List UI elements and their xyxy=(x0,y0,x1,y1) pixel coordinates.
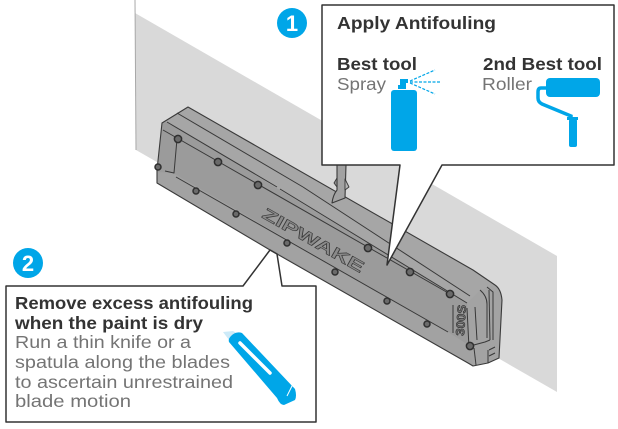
second best tool label: 2nd Best tool xyxy=(483,54,602,74)
callout 2 frame xyxy=(6,250,316,422)
zipwake interceptor device xyxy=(155,107,502,366)
best tool label: Best tool xyxy=(337,54,417,74)
mounting bracket xyxy=(332,165,349,203)
callout 2 heading: when the paint is dry xyxy=(14,313,203,333)
callout 2 body text: to ascertain unrestrained xyxy=(15,372,233,392)
icon: utility knife xyxy=(223,331,296,405)
brand logo: ZIPWAKE xyxy=(259,206,367,277)
icon: paint roller xyxy=(538,78,600,147)
callout 2 body text: spatula along the blades xyxy=(15,352,230,372)
callout 2 heading: Remove excess antifouling xyxy=(15,293,253,313)
grooves xyxy=(163,113,495,365)
step badge 2: 2 xyxy=(22,251,34,276)
wall xyxy=(135,0,557,392)
callout 1 frame xyxy=(322,5,614,265)
callout 2: remove excess antifouling xyxy=(6,250,316,422)
step badge 2 xyxy=(13,248,43,278)
callout 2 heading xyxy=(14,293,253,333)
bolts xyxy=(155,135,474,350)
callout 2 body text xyxy=(15,332,233,411)
device end cap xyxy=(467,285,502,366)
roller label: Roller xyxy=(482,74,532,94)
device top face xyxy=(162,107,495,303)
device outline xyxy=(157,107,502,366)
device bottom face xyxy=(157,172,473,366)
spray label: Spray xyxy=(337,74,386,94)
device body xyxy=(157,107,502,366)
callout 2 body text: Run a thin knife or a xyxy=(15,332,191,352)
callout 1 heading: Apply Antifouling xyxy=(337,13,496,33)
step badge 1 xyxy=(277,8,307,38)
callout 2 body text: blade motion xyxy=(15,391,131,411)
icon: spray can xyxy=(391,70,440,151)
step badge 1: 1 xyxy=(286,11,298,36)
callout 1: apply antifouling xyxy=(322,5,614,265)
model label: 300S xyxy=(453,304,469,336)
